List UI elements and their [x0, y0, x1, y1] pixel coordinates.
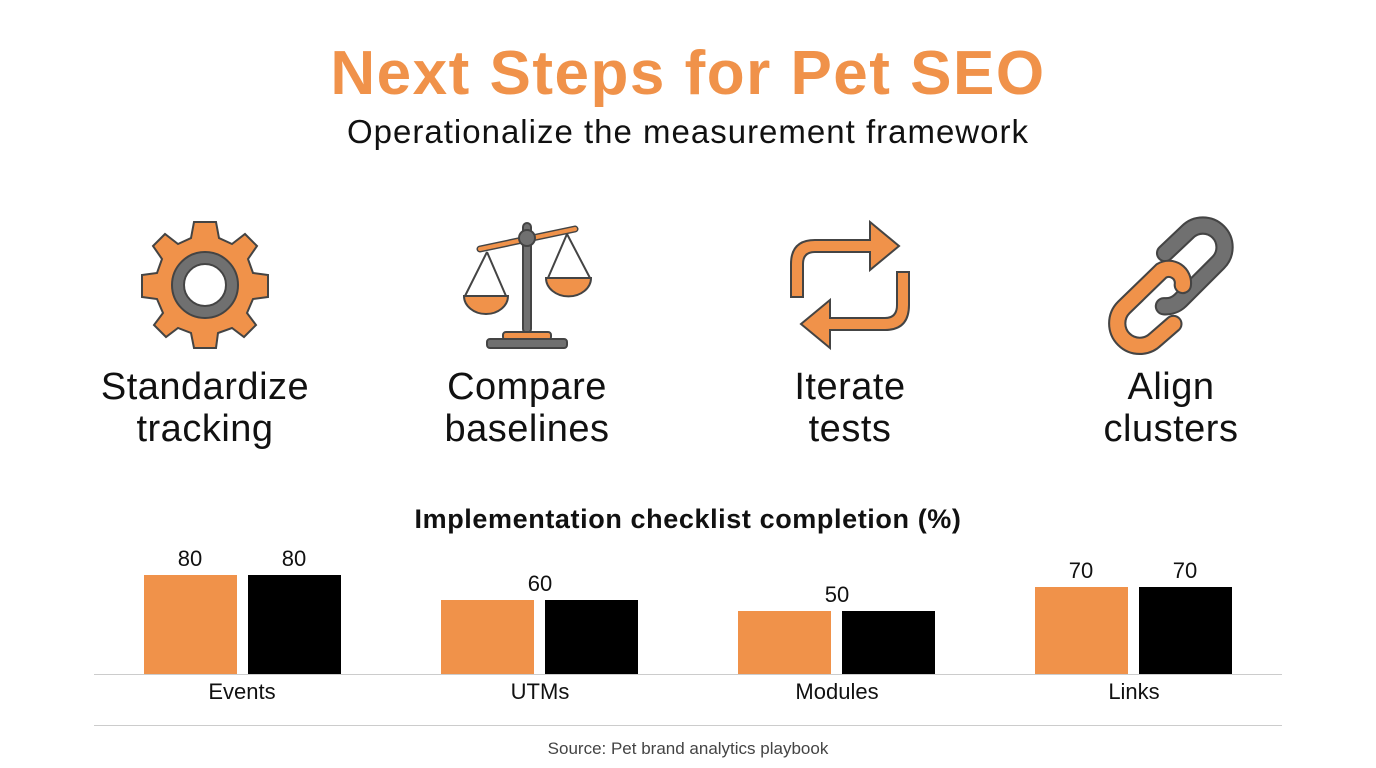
label: compare baselines: Compare	[447, 366, 607, 408]
label: iterate tests: Iterate	[794, 366, 906, 408]
label: iterate tests: tests	[809, 408, 891, 450]
label: iterate tests	[794, 366, 906, 450]
source: Source: Pet brand analytics playbook	[548, 739, 828, 758]
label: standardize tracking: Standardize	[101, 366, 309, 408]
bar chart: 80	[178, 546, 202, 571]
subtitle: Operationalize the measurement framework	[347, 113, 1029, 150]
label: standardize tracking: tracking	[136, 408, 274, 450]
bar chart: Links	[1108, 679, 1160, 704]
icon: chain links	[1117, 226, 1225, 346]
icon: gear	[142, 222, 268, 348]
bar chart: 60	[528, 571, 552, 596]
bar chart: Modules	[795, 679, 879, 704]
label: align clusters	[1104, 366, 1238, 450]
bar chart: UTMs	[511, 679, 569, 704]
icon: scales	[464, 223, 591, 348]
bar chart: 70	[1173, 558, 1197, 583]
chart title: Implementation checklist completion (%)	[414, 504, 962, 534]
bar chart: 50	[825, 582, 849, 607]
label: align clusters: Align	[1128, 366, 1214, 408]
label: compare baselines: baselines	[444, 408, 610, 450]
title: Next Steps for Pet SEO	[330, 39, 1046, 108]
label: align clusters: clusters	[1104, 408, 1238, 450]
bar chart: 80	[282, 546, 306, 571]
icon: iterate arrows	[791, 222, 909, 348]
bar chart: Events	[208, 679, 276, 704]
bar chart: 70	[1069, 558, 1093, 583]
label: compare baselines	[444, 366, 610, 450]
label: standardize tracking	[101, 366, 309, 450]
